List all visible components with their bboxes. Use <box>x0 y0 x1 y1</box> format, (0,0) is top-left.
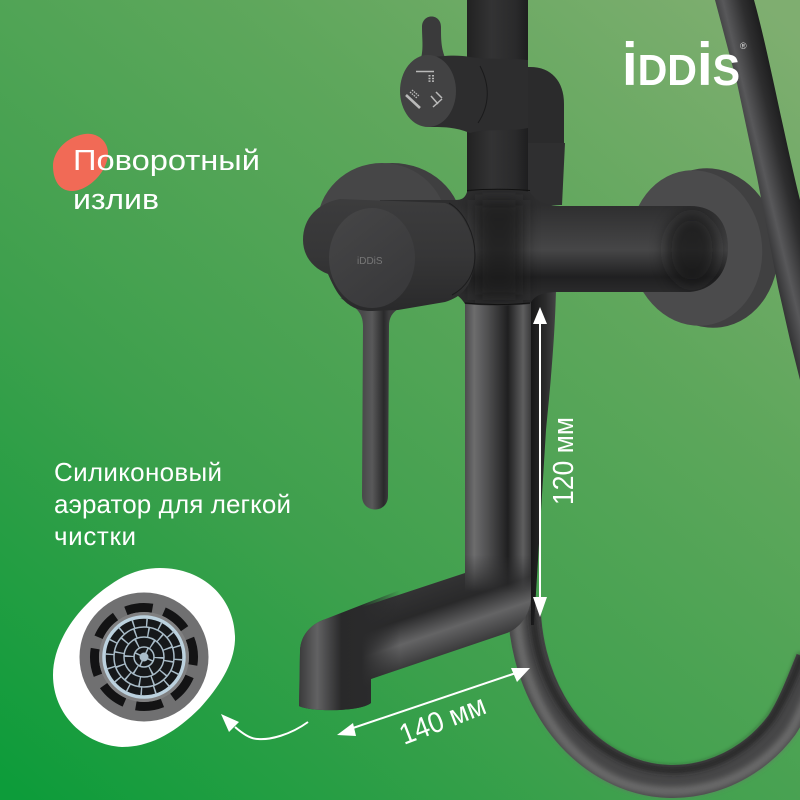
lower column <box>465 302 531 598</box>
upper column <box>467 0 528 192</box>
diverter face <box>400 55 456 127</box>
handle cap <box>329 208 415 308</box>
diverter pin <box>420 16 447 62</box>
diverter cylinder <box>428 56 528 133</box>
spout tip shading <box>299 590 400 710</box>
heading: Поворотный <box>73 145 260 177</box>
body shading <box>475 200 718 300</box>
heading blob <box>53 134 108 191</box>
dimension 140 mm <box>337 668 530 752</box>
heading <box>73 145 260 216</box>
lever handle <box>340 298 400 510</box>
arrow from spout to aerator <box>221 714 308 739</box>
mixer body <box>380 189 728 306</box>
elbow behind column <box>528 67 564 143</box>
registered mark: ® <box>740 41 747 51</box>
aerator outer ring <box>80 592 208 722</box>
aerator caption: Силиконовый <box>54 457 222 487</box>
dimension 120 mm <box>533 307 580 617</box>
aerator mesh <box>104 617 184 697</box>
diverter knob <box>400 16 528 133</box>
tapered pipe below body <box>531 290 556 625</box>
mode icons <box>406 72 442 108</box>
spout <box>299 545 531 710</box>
tapered pipe behind body upper <box>528 143 565 205</box>
hose lower <box>517 600 800 791</box>
wall flange right <box>620 159 788 337</box>
engraved brand: iDDiS <box>357 256 383 267</box>
white blob <box>53 568 235 747</box>
brand logo: iDDiS <box>622 31 740 98</box>
dimension 140 mm: 140 мм <box>395 689 491 752</box>
wall flange left <box>317 163 462 289</box>
dimension 120 mm: 120 мм <box>548 417 580 505</box>
aerator caption <box>54 457 291 551</box>
hose upper right <box>715 0 800 380</box>
heading: излив <box>73 184 159 216</box>
handle cylinder <box>303 199 475 311</box>
aerator caption: аэратор для легкой <box>54 489 291 519</box>
aerator caption: чистки <box>54 521 136 551</box>
aerator callout <box>53 568 235 747</box>
